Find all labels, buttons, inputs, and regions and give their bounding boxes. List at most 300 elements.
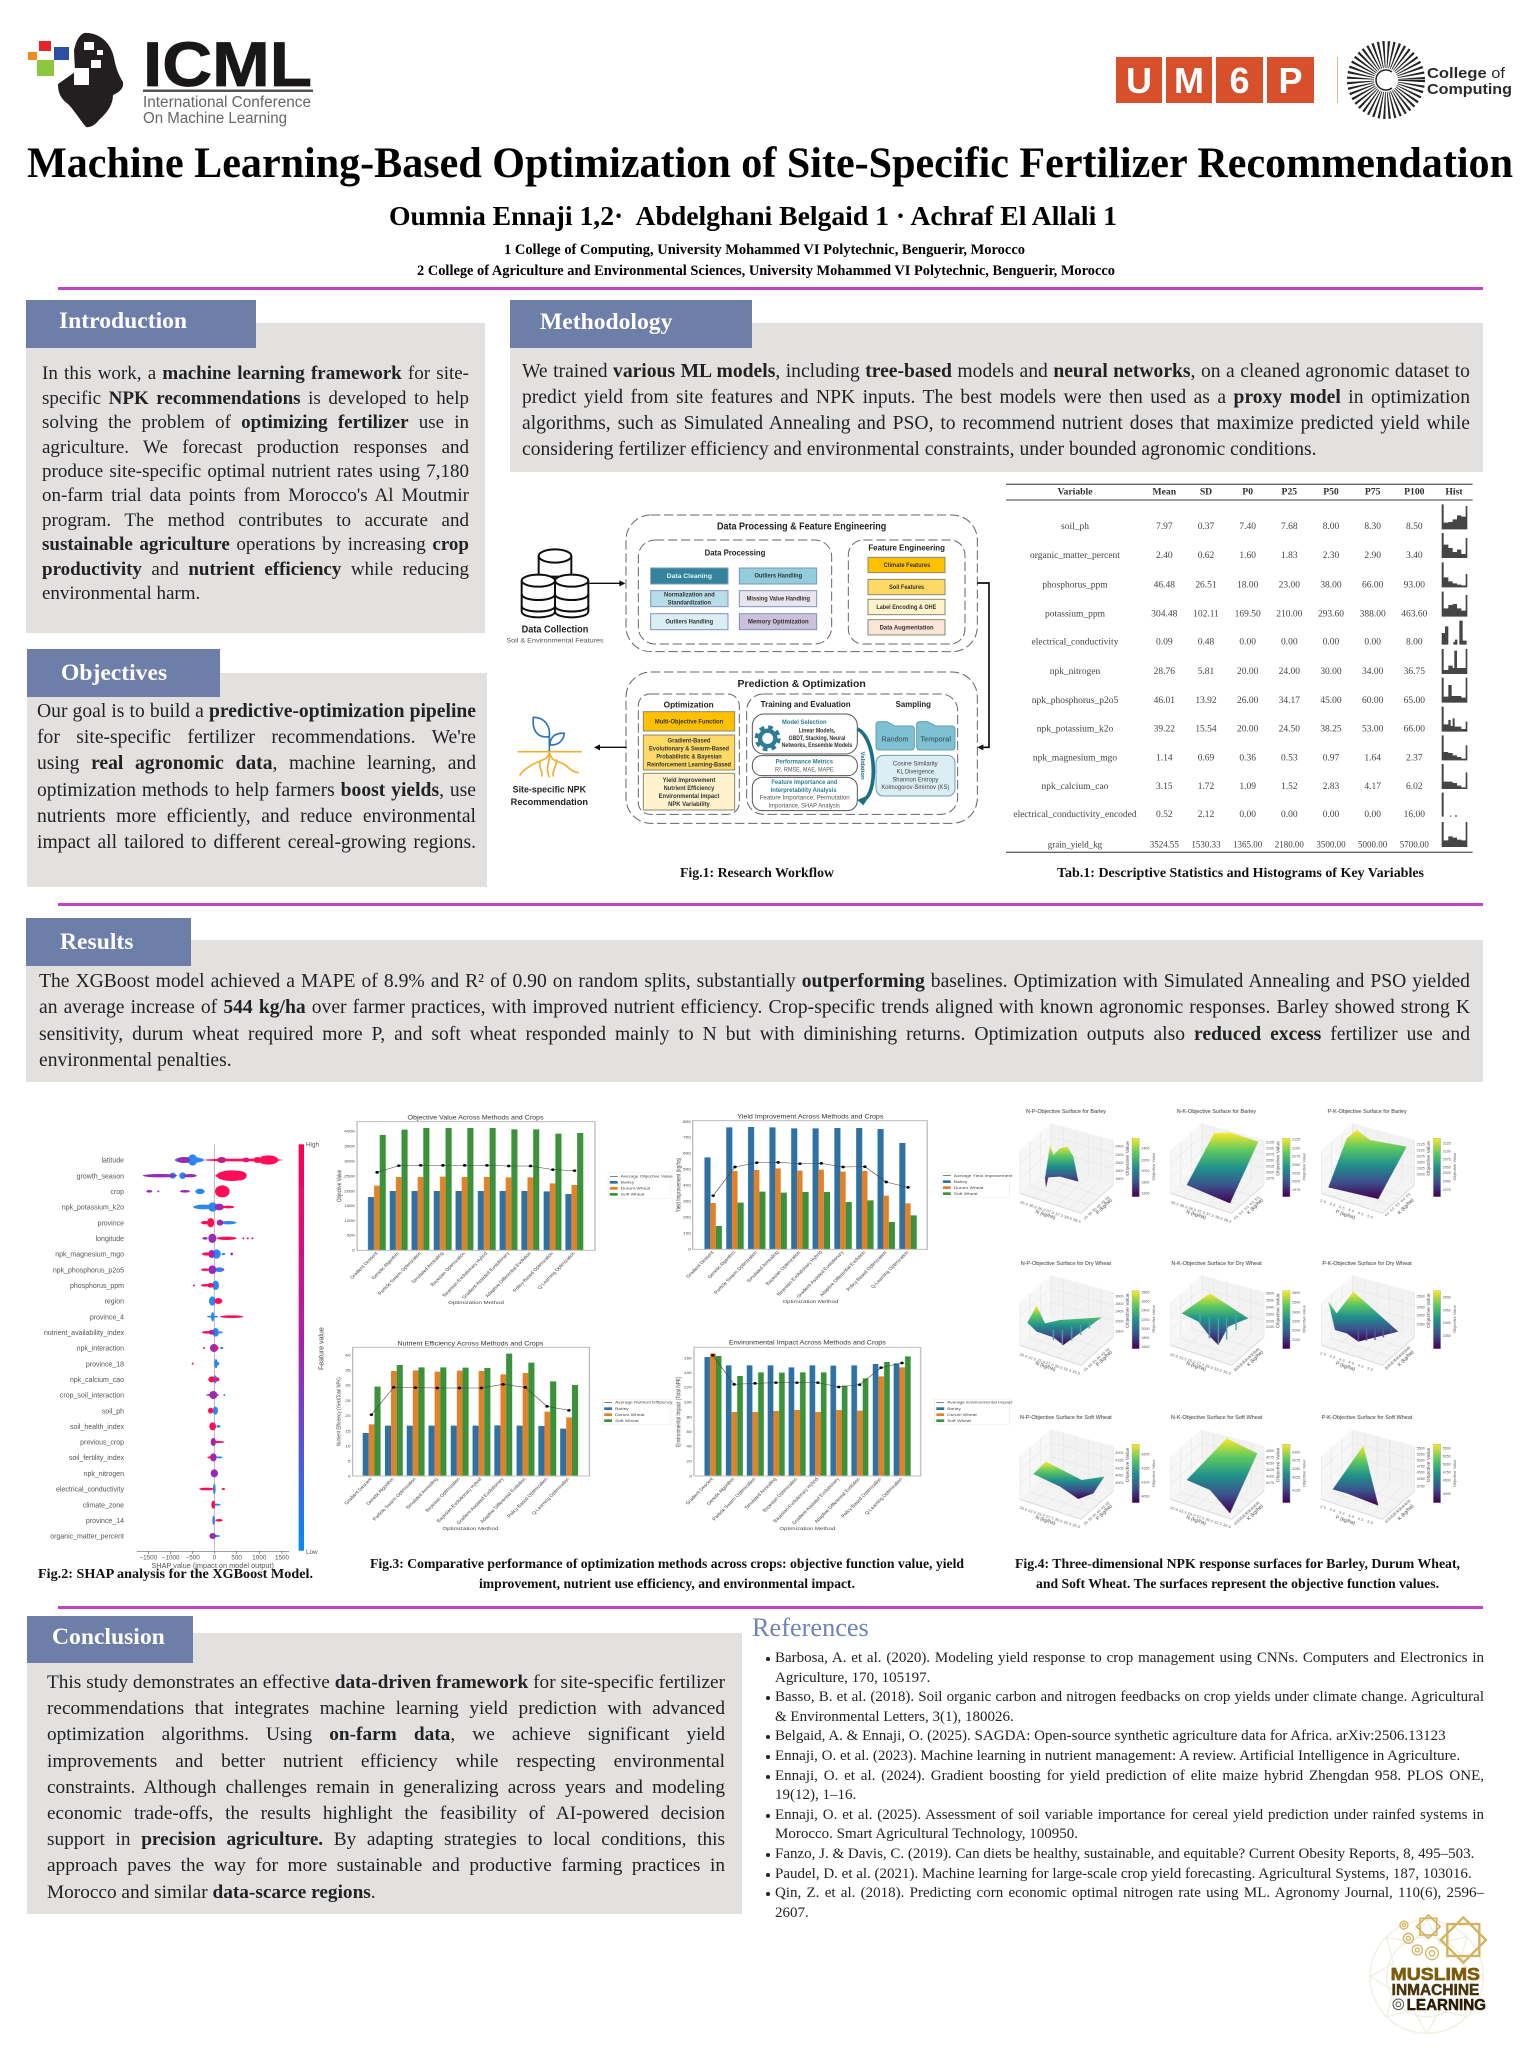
3D z tick labels: 1975 [1266,1176,1274,1180]
3D z tick labels: 3000 [1115,1294,1123,1298]
environmental legend: Average Environmental Impact [947,1400,1013,1405]
text: conclusion body: recommendations that integrates machine learning yield prediction with advanced [47,1698,725,1719]
shap x axis: −500 [186,1554,200,1561]
3D z tick labels: 4250 [1266,1462,1274,1466]
table body rows: 0.97 [1323,753,1340,763]
table body rows: 24.00 [1279,667,1300,677]
shap colorbar: High [306,1142,319,1149]
table body rows: potassium_ppm [1045,610,1106,620]
objective average line [375,1164,576,1174]
yield bars: durum wheat [710,1168,911,1249]
caption: table 1: Tab.1: Descriptive Statistics and Histograms of Key Variables [1057,866,1425,881]
icon: gear [757,727,779,749]
yield y ticks: 300 [683,1199,692,1204]
shap feature labels: electrical_conductivity [56,1487,125,1494]
nutrient bars: durum wheat [369,1370,572,1476]
panel: introduction [26,323,485,633]
colorbar ticks: 2000 [1292,1180,1300,1184]
table: descriptive statistics [1006,484,1473,852]
yield bars: soft wheat [716,1192,917,1249]
3D z tick labels: 2500 [1417,1295,1425,1299]
3D z tick labels: 2075 [1417,1154,1425,1158]
boxes: data processing steps: Outliers Handling [754,573,802,580]
3D z tick labels: 2200 [1266,1320,1274,1324]
3D horizontal axis labels: N (kg/ha) [1035,1361,1056,1373]
box: sampling metrics: Shannon Entropy [892,777,938,783]
colorbar ticks: 2600 [1292,1291,1300,1295]
boxes: data processing steps: Memory Optimization [748,619,809,626]
3D z tick labels: 2050 [1266,1158,1274,1162]
heading: conclusion: Conclusion [52,1624,165,1650]
colorbar ticks: 4125 [1292,1489,1300,1493]
nutrient y ticks: 35 [345,1368,351,1373]
yield y ticks: 600 [683,1151,692,1156]
table body rows: npk_calcium_cao [1042,782,1109,792]
list: references: Belgaid, A. & Ennaji, O. (2025). SAGDA: Open-source synthetic agriculture data for Africa. arXiv:2506.13123 [775,1728,1446,1744]
arrow: validation loop [857,729,873,805]
3D floor tick labels: 45 50 55 60 65 [1233,1195,1260,1221]
colorbar ticks: 4050 [1141,1495,1149,1499]
3D z tick labels: 3750 [1417,1484,1425,1488]
table body rows: 0.00 [1239,810,1256,820]
table body rows: electrical_conductivity_encoded [1013,810,1137,820]
shap swarm: pink points [192,1155,283,1522]
shap feature labels: npk_phosphorus_p2o5 [53,1267,124,1274]
3D floor tick labels: 20.0 22.5 25.0 27.5 30.0 32.5 35.0 [1170,1352,1231,1376]
3D horizontal axis labels: P (kg/ha) [1095,1349,1114,1368]
caption: figure 3: improvement, nutrient use efficiency, and environmental impact. [479,1577,855,1592]
3D horizontal axis labels: K (kg/ha) [1397,1197,1415,1216]
boxes: optimization: Yield Improvement [663,777,716,784]
heading: objectives: Objectives [61,660,167,686]
table body rows: 5700.00 [1400,839,1429,849]
environmental legend [935,1399,1013,1424]
3D z tick labels: 2350 [1417,1322,1425,1326]
nutrient x ticks: Q-Learning Optimization [531,1477,572,1516]
nutrient x ticks: Bayesian-Evolutionary Hybrid [436,1477,484,1524]
yield x label: Optimization Method [782,1300,838,1305]
3D z axis labels: Objective Value [1275,1293,1281,1328]
boxes: feature engineering steps: Label Encoding & OHE [876,604,936,611]
objective y ticks [344,1129,356,1253]
boxes: feature engineering steps: Soil Features [889,584,925,591]
shap feature labels: climate_zone [83,1502,124,1509]
3D floor tick labels: 45 50 55 60 65 [1384,1192,1411,1217]
3D z tick labels: 2050 [1417,1160,1425,1164]
table body rows: 1.52 [1281,782,1298,792]
heading: sampling: Sampling [896,699,931,709]
text: training and evaluation boxes: Feature Importance and [771,779,838,786]
shap feature labels: nutrient_availability_index [44,1330,125,1337]
wordmark: Muslims in Machine Learning: LEARNING [1407,1997,1486,2014]
objective x ticks: Particle Swarm Optimization [377,1251,424,1296]
icon: UM6P tiles [1116,57,1314,103]
yield chart title: Yield Improvement Across Methods and Crops [737,1114,884,1120]
colorbar ticks: 4275 [1292,1459,1300,1463]
colorbar ticks: 2125 [1292,1138,1300,1142]
list: references: Ennaji, O. et al. (2023). Machine learning in nutrient management: A review. Artificial Intelligence in Agriculture. [775,1748,1460,1764]
3D floor tick labels: 20.0 22.5 25.0 27.5 30.0 32.5 35.0 [1019,1506,1080,1529]
boxes: optimization: Probabilistic & Bayesian [656,754,722,761]
nutrient x ticks: Simulated Annealing [405,1477,440,1510]
colorbar ticks: 2500 [1292,1301,1300,1305]
3D z tick labels: 2025 [1266,1164,1274,1168]
colorbar ticks: 2400 [1141,1146,1149,1150]
3D floor tick labels: 25 30 35 40 45 50 [1083,1501,1110,1526]
colorbar captions: Objective Value [1301,1152,1306,1180]
table histograms [1442,504,1467,847]
yield legend [941,1173,1013,1197]
text: training and evaluation boxes: Interpretability Analysis [771,787,837,794]
environmental x ticks: Bayesian-Evolutionary Hybrid [772,1477,821,1524]
yield x ticks: Simulated Annealing [746,1250,781,1284]
boxes: optimization: Evolutionary & Swarm-Based [649,746,729,753]
table body rows: phosphorus_ppm [1042,580,1108,590]
table body rows: 388.00 [1360,610,1386,620]
nutrient y ticks: 20 [345,1414,351,1418]
arrow: validation loop: Validation [859,752,865,780]
text: objectives body: using real agronomic data, machine learning, and [37,753,476,774]
3D horizontal axis labels: N (kg/ha) [1185,1515,1207,1527]
icon: data collection cylinders [522,549,588,617]
table body rows: 5.81 [1198,667,1215,677]
table body rows: 3524.55 [1150,839,1179,849]
yield bars: barley [704,1127,905,1249]
colorbar ticks: 2050 [1292,1163,1300,1167]
boxes: data processing steps: Normalization and [664,592,715,599]
3D z tick labels: 5500 [1417,1446,1425,1450]
shap feature labels: npk_magnesium_mgo [55,1252,124,1259]
yield legend: Soft Wheat [954,1192,978,1196]
box: sampling metrics: Kolmogorov-Smirnov (KS) [881,785,949,791]
colorbar ticks: 5000 [1443,1462,1451,1466]
text: objectives body: impact all tailored to different cereal-growing regions. [37,832,476,853]
shap colorbar: Feature value [319,1327,326,1370]
shap feature labels: province_4 [90,1314,124,1321]
3D floor tick labels: 25 30 35 40 45 50 [1083,1195,1110,1221]
shap feature labels: phosphorus_ppm [70,1283,124,1290]
shap feature labels [44,1158,125,1541]
heading: feature engineering: Feature Engineering [868,542,945,552]
table body rows: 0.48 [1198,638,1215,648]
boxes: optimization: Reinforcement Learning-Based [647,762,731,769]
yield x ticks: Gradient-Assisted Evolutionary [795,1250,846,1299]
yield x ticks [685,1250,911,1299]
colorbar ticks: 2000 [1141,1327,1149,1331]
environmental legend: Soft Wheat [947,1419,972,1423]
table body rows: 293.60 [1318,610,1344,620]
text: training and evaluation boxes: Linear Models, [799,728,836,735]
objective y ticks: 2000 [344,1189,356,1193]
text: methodology body: algorithms, such as Simulated Annealing and PSO, to recommend nutrient doses that maximize predicted yield while [522,413,1470,434]
table body rows: 66.00 [1404,725,1425,735]
chart: objective value [337,1115,674,1306]
3D z tick labels: 2400 [1266,1306,1274,1310]
text: site-specific NPK recommendation: Site-specific NPK [513,784,586,794]
environmental x label: Optimization Method [779,1527,835,1532]
environmental x ticks: Policy-Based Optimization [840,1477,884,1519]
heading: data processing and feature engineering: Data Processing & Feature Engineering [717,522,886,533]
3D floor tick labels: 35.5 36.0 36.5 37.0 37.5 38.0 38.5 [1020,1200,1081,1224]
colorbar captions: Objective Value [1151,1304,1156,1333]
colorbar ticks: 1600 [1141,1345,1149,1349]
table body rows: 60.00 [1362,696,1384,706]
objective legend: Barley [621,1180,635,1185]
wordmark: College of Computing: College of [1427,65,1506,82]
3D z tick labels: 2000 [1115,1161,1123,1165]
chart: yield improvement [676,1114,1013,1305]
objective x ticks: Genetic Algorithm [370,1251,402,1281]
table body rows: 210.00 [1276,610,1303,620]
objective bars: durum wheat [374,1177,577,1250]
table body rows: 38.00 [1320,580,1342,590]
objective bars: barley [368,1191,571,1250]
table body rows: 0.37 [1198,522,1215,532]
colorbar ticks: 2400 [1292,1310,1300,1314]
3D horizontal axis labels: K (kg/ha) [1246,1349,1265,1368]
3D z axis labels [1125,1141,1432,1482]
3D z tick labels: 2075 [1266,1152,1274,1156]
3D z tick labels: 2400 [1115,1310,1123,1314]
text: training and evaluation boxes: Importance, SHAP Analysis [769,802,840,809]
nutrient x ticks: Policy-Based Optimization [506,1477,550,1519]
chart: environmental impact [676,1340,1013,1532]
table body rows: 1.64 [1364,753,1381,763]
table body rows: 0.69 [1198,753,1215,763]
nutrient chart title: Nutrient Efficiency Across Methods and Crops [397,1341,544,1347]
nutrient legend: Durum Wheat [615,1413,645,1417]
icon: folders random and temporal: Random [882,736,909,743]
table body rows: 3500.00 [1316,839,1346,849]
shap swarm: purple points [143,1157,250,1539]
table body rows: 23.00 [1279,580,1300,590]
nutrient y ticks: 30 [345,1383,351,1388]
colorbar captions [1151,1152,1457,1487]
environmental y ticks: 0 [689,1474,693,1478]
table body rows: 1.60 [1239,551,1256,561]
environmental x ticks: Particle Swarm Optimization [711,1477,758,1522]
colorbar ticks: 2000 [1141,1169,1149,1173]
boxes: data processing steps: Outliers Handling [665,619,713,626]
table header: SD [1200,487,1212,498]
3D horizontal axis labels: P (kg/ha) [1095,1197,1114,1216]
3D horizontal axis labels: N (kg/ha) [1035,1209,1056,1221]
text: results body: sensitivity, durum wheat required more P, and soft wheat responded mainly to N but with diminishing returns. Optimization outputs also reduced excess fertilizer use and [39,1024,1470,1045]
wordmark: International Conference On Machine Learning: On Machine Learning [143,110,287,127]
3D z tick labels: 1600 [1115,1177,1123,1181]
yield y ticks: 400 [683,1183,692,1188]
heading: conclusion [27,1616,193,1663]
3D horizontal axis labels [1035,1197,1415,1527]
colorbars [1132,1138,1441,1503]
colorbar ticks: 4500 [1443,1479,1451,1483]
3D z tick labels: 2125 [1266,1140,1274,1144]
shap feature labels: organic_matter_percent [50,1534,124,1541]
objective y ticks: 4000 [344,1129,356,1134]
shap x axis: −1500 [139,1554,158,1561]
shap x axis: 500 [231,1554,242,1561]
environmental y ticks: 40 [686,1444,693,1449]
3D z tick labels: 4150 [1115,1459,1123,1463]
surface panel titles: N-K-Objective Surface for Dry Wheat [1171,1261,1262,1267]
wordmark: ICML: ICML [143,30,312,100]
environmental x ticks: Simulated Annealing [743,1477,779,1510]
objective y ticks: 3500 [344,1144,356,1149]
table body rows: soil_ph [1061,522,1089,532]
shap feature labels: province_18 [86,1361,124,1368]
icon: gold stars [1400,1915,1486,1963]
text: methodology body: predict yield from site features and NPK inputs. The best models were then used as a proxy model in optimization [522,387,1470,408]
table body rows: 20.00 [1237,725,1259,735]
panel: methodology [510,323,1483,472]
caption: figure 3: Fig.3: Comparative performance of optimization methods across crops: objective function value, yield [370,1557,964,1572]
nutrient x ticks [343,1476,572,1526]
table body rows: 65.00 [1404,696,1425,706]
heading: references: References [752,1613,869,1642]
3D z axis labels: Objective Value [1275,1448,1281,1482]
colorbar ticks: 2300 [1292,1319,1300,1323]
table body rows: 463.60 [1401,610,1428,620]
colorbar ticks: 4200 [1141,1453,1149,1457]
table header: Variable [1057,487,1093,498]
environmental y ticks: 160 [684,1356,693,1360]
table header: P100 [1404,487,1425,498]
text: introduction body: specific NPK recommendations is developed to help [42,388,469,409]
colorbar ticks: 2400 [1443,1321,1451,1325]
wordmark: College of Computing [1427,65,1512,98]
affiliations [417,242,1115,279]
table body rows: 5000.00 [1358,839,1388,849]
boxes: training and evaluation [752,714,857,811]
heading: results: Results [60,929,133,955]
yield x ticks: Adaptive Differential Evolution [819,1250,868,1298]
table body rows: 28.76 [1154,667,1175,677]
3D z tick labels: 2100 [1266,1146,1274,1150]
objective bars: soft wheat [380,1128,583,1250]
table body rows: 7.68 [1281,522,1298,532]
table body rows: 36.75 [1404,667,1425,677]
3D z tick labels: 2000 [1115,1320,1123,1324]
heading: methodology [510,300,752,348]
shap feature labels: crop [110,1189,124,1196]
table body rows: 8.50 [1406,522,1423,532]
objective legend [608,1173,674,1198]
table body rows: 66.00 [1362,580,1384,590]
chart: SHAP beeswarm [44,1142,326,1570]
text: data collection: Data Collection [522,624,588,635]
arrow: processing to prediction [977,583,989,750]
table body rows: organic_matter_percent [1030,551,1120,561]
logo: UM6P College of Computing [1116,55,1512,105]
text: methodology body: We trained various ML models, including tree-based models and neural networks, on a cleaned agronomic dataset to [522,361,1470,382]
environmental x ticks [685,1476,905,1526]
3D z tick labels: 4250 [1417,1477,1425,1481]
objective chart title: Objective Value Across Methods and Crops [408,1115,544,1121]
shap feature labels: latitude [101,1158,124,1165]
3D z axis labels: Objective Value [1125,1293,1131,1328]
colorbar ticks: 4750 [1443,1470,1451,1474]
title: Machine Learning-Based Optimization of Site-Specific Fertilizer Recommendation [27,140,1513,187]
objective legend: Durum Wheat [621,1186,651,1191]
icon: UM6P tiles: P [1278,60,1303,101]
table body rows: 3.15 [1156,782,1173,792]
affiliations: 2 College of Agriculture and Environmental Sciences, University Mohammed VI Polytechnic, Benguerir, Morocco [417,263,1115,279]
icon: plant with roots [518,717,581,777]
3D floor tick labels: 25 30 35 40 45 50 [1320,1351,1373,1372]
colorbar ticks: 5500 [1443,1446,1451,1450]
3D z tick labels: 2000 [1266,1170,1274,1174]
text: conclusion body: support in precision agriculture. By adapting strategies to local conditions, this [47,1829,725,1850]
table body rows: 1530.33 [1191,839,1221,849]
table body rows: 20.00 [1237,667,1259,677]
objective y ticks: 500 [347,1233,356,1238]
list: references: Morocco. Smart Agricultural Technology, 100950. [775,1826,1078,1842]
colorbar ticks: 2050 [1443,1166,1451,1170]
colorbar ticks: 4100 [1141,1481,1149,1485]
3D z tick labels: 2500 [1266,1299,1274,1303]
environmental y label: Environmental Impact (Total NPK) [676,1376,683,1447]
nutrient y ticks: 0 [348,1474,351,1478]
table body rows: 0.00 [1323,810,1340,820]
shap x axis: 1500 [275,1554,290,1561]
icon: faint mandala [1370,1920,1483,2033]
colorbar ticks: 2075 [1443,1158,1451,1162]
table body rows: 53.00 [1362,725,1384,735]
shap feature labels: region [105,1299,124,1306]
heading: results [26,918,191,966]
table body rows: 6.02 [1406,782,1423,792]
colorbar ticks [1141,1138,1451,1499]
objective x ticks: Q-Learning Optimization [536,1251,577,1290]
text: conclusion body: Morocco and similar data-scarce regions. [47,1882,376,1903]
text: site-specific NPK recommendation: Recommendation [511,797,588,807]
caption: figure 3 [370,1557,964,1592]
arrow: data to processing [589,580,625,586]
table body rows: 0.53 [1281,753,1298,763]
list: references: Ennaji, O. et al. (2024). Gradient boosting for yield prediction of elite maize hybrid Zhengdan 958. PLOS ONE, [775,1768,1484,1784]
text: objectives body: Our goal is to build a predictive-optimization pipeline [37,701,476,722]
colorbar ticks: 2025 [1292,1171,1300,1175]
colorbar captions: Objective Value [1301,1459,1306,1487]
text: objectives body [37,701,476,853]
table header: P50 [1323,487,1339,498]
text: results body: an average increase of 544 kg/ha over farmer practices, with improved nutrient efficiency. Crop-specific trends aligned with known agronomic responses. Barley showed strong K [39,997,1470,1018]
environmental bars: soft wheat [716,1356,911,1476]
text: introduction body: productivity and nutrient efficiency while reducing [42,559,469,580]
nutrient x ticks: Gradient Descent [343,1476,375,1506]
surface panel titles: N-K-Objective Surface for Soft Wheat [1171,1415,1263,1421]
3D floor tick labels: 20 25 30 35 40 45 50 55 60 [1233,1347,1260,1372]
heading: data processing: Data Processing [705,548,765,558]
table body rows: 1.09 [1239,782,1256,792]
environmental y ticks: 80 [686,1415,693,1419]
3D z tick labels: 4500 [1417,1470,1425,1474]
text: results body [39,971,1470,1071]
table body rows: 2.37 [1406,753,1423,763]
colorbar ticks: 2075 [1292,1155,1300,1159]
3D z tick labels: 4000 [1115,1481,1123,1485]
yield x ticks: Q-Learning Optimization [870,1250,911,1289]
table body rows: 0.00 [1364,810,1381,820]
text: methodology body: considering fertilizer efficiency and environmental constraints, under bounded agronomic conditions. [522,439,1317,460]
objective legend: Average Objective Value [621,1174,674,1179]
colorbar ticks: 1975 [1292,1188,1300,1192]
3D z tick labels: 2100 [1417,1148,1425,1152]
text: training and evaluation boxes: Model Selection [782,719,827,726]
logo: ICML [28,30,313,127]
surfaces [1027,1130,1407,1513]
yield x ticks: Particle Swarm Optimization [713,1250,760,1295]
